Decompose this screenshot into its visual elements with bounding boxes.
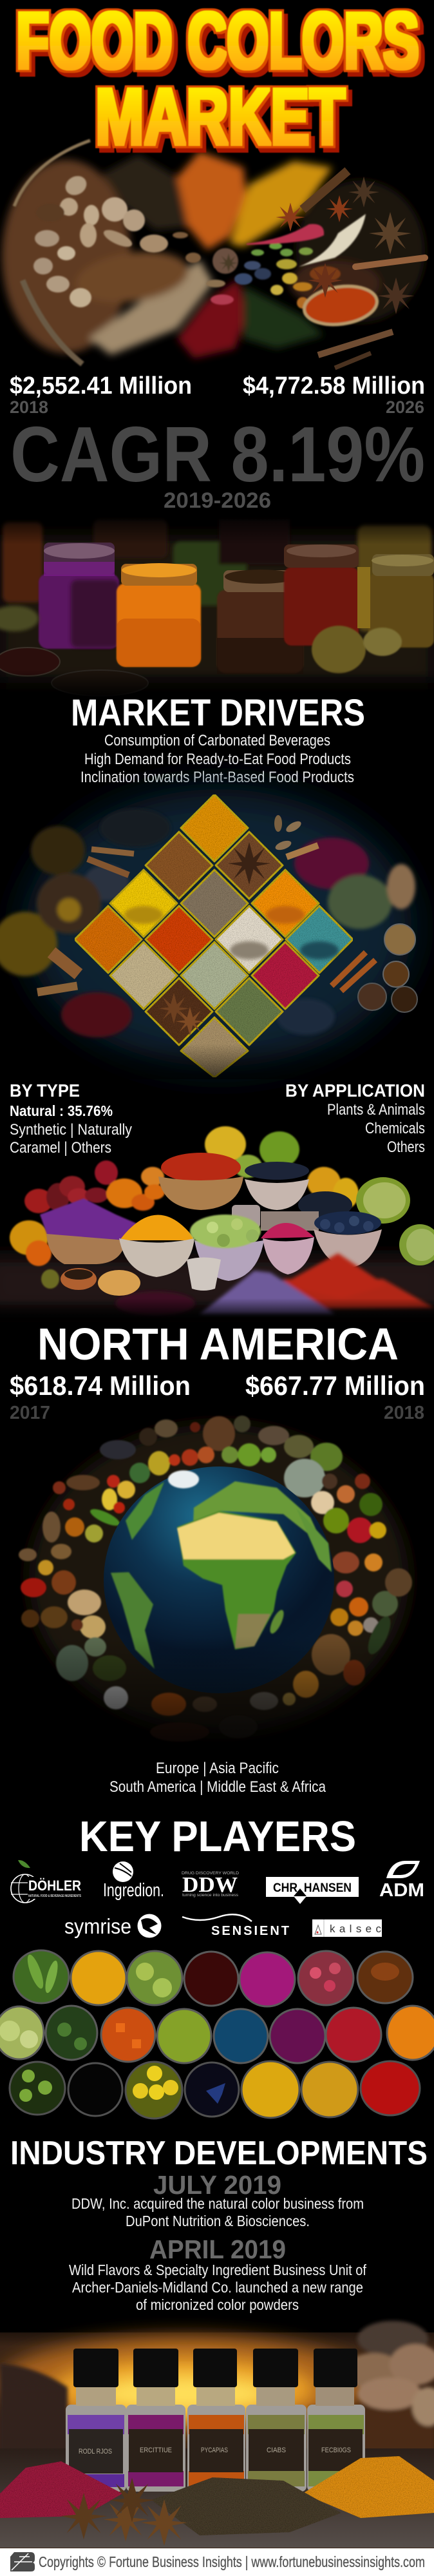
- grapes left and lemon: [10, 1220, 59, 1289]
- heading: market drivers: MARKET DRIVERS: [71, 692, 365, 734]
- block: by type: Natural : 35.76%: [10, 1102, 113, 1119]
- globe: [104, 1466, 334, 1693]
- development: July 2019: [71, 2170, 364, 2229]
- development: July 2019: DDW, Inc. acquired the natural color business from: [71, 2195, 364, 2212]
- bottle 1: RODL RJOS: [79, 2448, 112, 2456]
- stat: north america 2017: $618.74 Million: [10, 1370, 191, 1401]
- grapes bowl: [190, 1215, 264, 1281]
- bowl of nuts: [309, 2321, 434, 2471]
- logo: Chr. Hansen: [266, 1877, 359, 1904]
- bottle 2: ERCITTIUE: [140, 2446, 172, 2454]
- development: April 2019: Wild Flavors & Specialty Ingredient Business Unit of: [69, 2262, 367, 2278]
- photo: globe surrounded by food: [0, 1416, 434, 1756]
- diamond spice tiles: [75, 794, 353, 1077]
- block: by type: BY TYPE: [10, 1081, 80, 1101]
- photo: spice tray: [0, 789, 434, 1079]
- back fruits: [24, 1126, 359, 1213]
- development: April 2019: of micronized color powders: [136, 2296, 299, 2313]
- market drivers list: Consumption of Carbonated Beverages: [104, 732, 330, 749]
- logo: Kalsec: [312, 1919, 382, 1937]
- stat: north america 2017: 2017: [10, 1403, 50, 1423]
- logo: Symrise: symrise: [64, 1914, 131, 1938]
- stat: north america 2018: 2018: [384, 1403, 424, 1423]
- regions list: Europe | Asia Pacific: [156, 1760, 279, 1777]
- stat: north america 2018: $667.77 Million: [245, 1370, 425, 1401]
- table: [0, 2448, 434, 2548]
- back jars: [3, 519, 431, 631]
- logo: ADM: ADM: [379, 1880, 424, 1901]
- cinnamon sticks: [303, 171, 425, 368]
- development: July 2019: DuPont Nutrition & Biosciences.: [126, 2213, 310, 2229]
- sunset glow: [0, 2336, 370, 2432]
- block: by type: [10, 1081, 132, 1157]
- table fade: [0, 509, 434, 544]
- bottom fade: [0, 1298, 434, 1321]
- stat: 2026 value: [243, 372, 425, 417]
- stat: 2018 value: 2018: [10, 398, 48, 417]
- row 2: [0, 2006, 434, 2063]
- logo: Döhler: NATURAL FOOD & BEVERAGE INGREDIENTS: [28, 1894, 81, 1898]
- blue surface glow: [26, 789, 412, 1066]
- heading: north america: NORTH AMERICA: [37, 1319, 399, 1369]
- ring edge fade: [0, 1637, 434, 1756]
- berries bowl: [314, 1211, 382, 1268]
- left shade: [0, 2363, 68, 2474]
- bottle 4: CIABS: [267, 2446, 286, 2454]
- development: April 2019: Archer-Daniels-Midland Co. launched a new range: [72, 2279, 363, 2296]
- bottle 3: PYCAPIAS: [201, 2446, 228, 2454]
- small foreground items: [61, 1258, 221, 1296]
- regions list: South America | Middle East & Africa: [109, 1778, 326, 1796]
- photo: bowls of colors: [0, 1950, 434, 2119]
- bottle 1: [66, 2349, 126, 2492]
- lime halves: [356, 1177, 434, 1265]
- bottle 4: [246, 2349, 307, 2492]
- market drivers list: High Demand for Ready-to-Eat Food Products: [84, 751, 351, 768]
- photo: product bottles: [0, 2314, 434, 2548]
- row 1: [14, 1950, 413, 2006]
- small bowls: [358, 924, 417, 1012]
- icon: Fortune Business Insights logo: [10, 2552, 35, 2571]
- bottle 3: [187, 2349, 245, 2492]
- bowl contents: [0, 1953, 399, 2104]
- purple powder bowl: [40, 1198, 138, 1264]
- logo: Ingredion: Ingredion.: [103, 1880, 164, 1901]
- block: by type: Caramel | Others: [10, 1139, 111, 1157]
- purple jar: [39, 543, 119, 649]
- limes and bowls: [0, 606, 402, 696]
- yellow powder bowl: [119, 1215, 194, 1277]
- title: MARKET: [95, 73, 345, 162]
- bottle 5: [307, 2349, 365, 2492]
- stat: 2026 value: 2026: [386, 398, 424, 417]
- yellow jar: [357, 554, 434, 648]
- heading: key players: KEY PLAYERS: [79, 1812, 356, 1861]
- logo: Döhler: [11, 1860, 83, 1903]
- logo: DDW: turning science into business: [182, 1894, 238, 1898]
- back bowls: [158, 1153, 352, 1231]
- logo: Ingredion: [103, 1861, 164, 1901]
- dark ground ring: [29, 1424, 409, 1733]
- stat: 2026 value: $4,772.58 Million: [243, 372, 425, 399]
- logo: Chr. Hansen: CHR HANSEN: [273, 1881, 352, 1895]
- pulses and seeds: [211, 214, 379, 329]
- block: by application: Others: [387, 1139, 425, 1156]
- table surface: [0, 1256, 434, 1311]
- amber backdrop: [0, 2332, 434, 2548]
- title: [16, 0, 419, 162]
- footer band: [0, 2548, 434, 2576]
- stat: CAGR: 2019-2026: [164, 488, 271, 513]
- regions list: [109, 1760, 326, 1796]
- logo: DDW: DRUG DISCOVERY WORLD: [182, 1871, 239, 1876]
- stat: 2018 value: [10, 372, 192, 417]
- logo: Döhler: DÖHLER: [28, 1878, 81, 1894]
- block: by application: BY APPLICATION: [285, 1081, 425, 1101]
- development: April 2019: [69, 2235, 367, 2313]
- row 3: [10, 2061, 420, 2119]
- spice powders: [2, 151, 425, 358]
- stat: 2018 value: $2,552.41 Million: [10, 372, 192, 399]
- bottom fade: [0, 1044, 434, 1079]
- photo: spice powders hero: [2, 140, 425, 368]
- logo: DDW: DDW: [182, 1873, 238, 1897]
- red jar: [284, 544, 359, 646]
- pink powder bowl: [261, 1223, 314, 1274]
- orange jar: [117, 563, 201, 667]
- cardamom pods and garlic: [14, 140, 225, 364]
- block: by application: [285, 1081, 425, 1156]
- continents: [111, 1470, 332, 1669]
- stat: north america 2017: [10, 1370, 191, 1423]
- surrounding spices: [0, 809, 415, 1037]
- bottle 2: [126, 2349, 185, 2492]
- food ring: [19, 1416, 412, 1742]
- logo: Kalsec: kalsec: [330, 1923, 381, 1935]
- bottle 5: FECBI0GS: [321, 2446, 351, 2454]
- development: April 2019: APRIL 2019: [149, 2235, 286, 2264]
- block: by type: Synthetic | Naturally: [10, 1121, 132, 1139]
- market drivers list: Inclination towards Plant-Based Food Products: [80, 769, 354, 786]
- logo: Sensient: [182, 1914, 289, 1938]
- logo: ADM: [379, 1861, 424, 1901]
- development: July 2019: JULY 2019: [153, 2170, 281, 2200]
- spice piles: [0, 2456, 434, 2535]
- star anise: [276, 177, 415, 314]
- brown jar: [217, 570, 303, 674]
- warm haze: [0, 535, 434, 683]
- star anise on table: [61, 2478, 187, 2546]
- photo: jars of food color: [0, 509, 434, 699]
- photo: fruit and colored powders: [0, 1126, 434, 1321]
- market drivers list: [80, 732, 354, 786]
- cinnamon and wood pieces: [37, 815, 375, 992]
- logo: Sensient: SENSIENT: [211, 1924, 289, 1938]
- powder heaps: [115, 1253, 434, 1316]
- stat: north america 2018: [245, 1370, 425, 1423]
- tile centre accents: [124, 842, 339, 1036]
